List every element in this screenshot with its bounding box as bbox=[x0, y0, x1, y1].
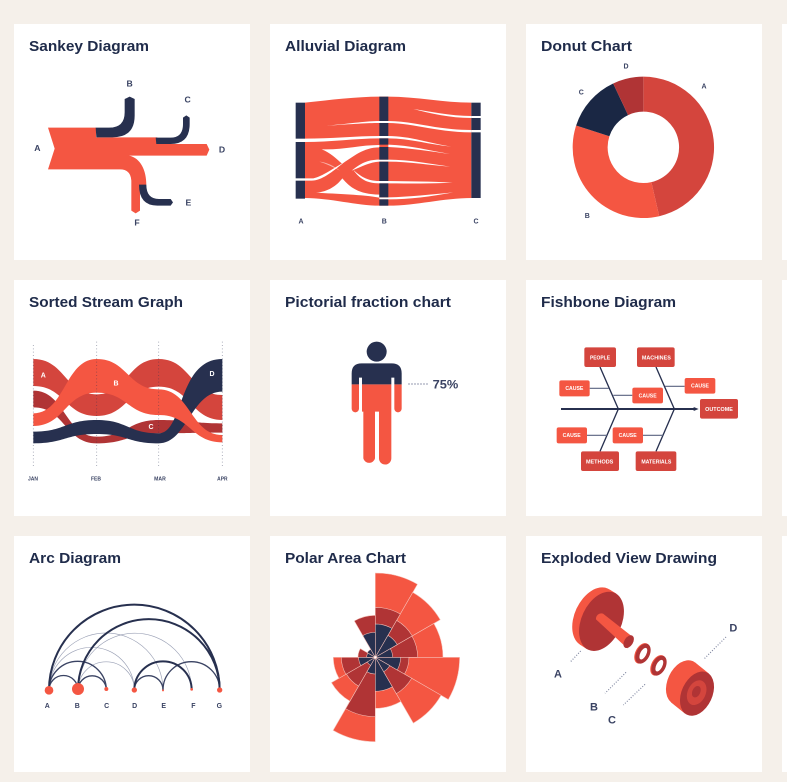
alluvial chart: C bbox=[473, 219, 479, 226]
stream graph: APR bbox=[217, 477, 228, 483]
part D: wheel bbox=[659, 655, 721, 721]
arc chart: A bbox=[45, 703, 50, 710]
heading: Alluvial Diagram: Alluvial Diagram bbox=[285, 38, 406, 55]
exploded view illustration: C bbox=[608, 714, 616, 726]
fishbone chart: CAUSE bbox=[563, 433, 581, 439]
heading: Fishbone Diagram: Fishbone Diagram bbox=[541, 294, 676, 311]
arc chart bbox=[45, 605, 222, 710]
alluvial chart: A bbox=[298, 219, 304, 226]
stream graph: MAR bbox=[154, 477, 166, 483]
polar area chart bbox=[328, 573, 460, 742]
donut chart: B bbox=[585, 213, 590, 220]
alluvial chart: B bbox=[382, 219, 387, 226]
donut chart: A bbox=[701, 83, 707, 90]
heading: Sorted Stream Graph: Sorted Stream Graph bbox=[29, 294, 183, 311]
arc chart: C bbox=[104, 703, 109, 710]
heading: Exploded View Drawing: Exploded View Drawing bbox=[541, 550, 717, 567]
exploded view illustration: B bbox=[590, 702, 598, 714]
donut chart: C bbox=[579, 90, 584, 97]
arc chart: F bbox=[191, 703, 196, 710]
exploded view illustration: D bbox=[729, 622, 737, 634]
heading: Sankey Diagram: Sankey Diagram bbox=[29, 38, 149, 55]
sankey chart bbox=[34, 79, 225, 228]
panel: Sankey Diagram bbox=[14, 24, 250, 260]
panel: Fishbone Diagram bbox=[526, 280, 762, 516]
sankey chart: A bbox=[34, 143, 41, 153]
sankey chart: F bbox=[134, 218, 140, 228]
stream graph: A bbox=[41, 372, 46, 379]
fishbone chart: CAUSE bbox=[565, 386, 584, 392]
heading: Arc Diagram: Arc Diagram bbox=[29, 550, 121, 567]
heading: Polar Area Chart: Polar Area Chart bbox=[285, 550, 406, 567]
donut chart bbox=[573, 64, 714, 220]
panel: Pictorial fraction chart bbox=[270, 280, 506, 516]
fishbone chart: MATERIALS bbox=[641, 459, 672, 465]
arc chart: D bbox=[132, 703, 137, 710]
arc chart: E bbox=[161, 703, 166, 710]
panel: Arc Diagram bbox=[14, 536, 250, 772]
heading: Donut Chart: Donut Chart bbox=[541, 38, 632, 55]
arc chart: G bbox=[217, 703, 222, 710]
stream graph bbox=[28, 342, 228, 483]
fishbone chart: MACHINES bbox=[642, 355, 671, 361]
heading: Pictorial fraction chart: Pictorial fraction chart bbox=[285, 294, 451, 311]
fishbone chart bbox=[557, 347, 738, 471]
sankey chart: E bbox=[185, 197, 191, 207]
sankey chart: C bbox=[185, 95, 192, 105]
panel: Alluvial Diagram bbox=[270, 24, 506, 260]
pictogram person: 75% bbox=[433, 378, 459, 392]
cropped cards on the right edge bbox=[782, 24, 787, 772]
panel: Sorted Stream Graph bbox=[14, 280, 250, 516]
fishbone chart: PEOPLE bbox=[590, 355, 610, 361]
sankey chart: B bbox=[127, 79, 133, 89]
fishbone chart: METHODS bbox=[586, 459, 614, 465]
panel: Donut Chart bbox=[526, 24, 762, 260]
panel: Polar Area Chart bbox=[270, 536, 506, 772]
part A: disc with shaft bbox=[563, 580, 636, 658]
part B: ring bbox=[631, 641, 654, 666]
part C: ring bbox=[647, 653, 670, 678]
stream graph: D bbox=[209, 371, 215, 378]
donut chart: D bbox=[623, 64, 629, 71]
alluvial chart bbox=[296, 97, 481, 226]
arc chart: B bbox=[75, 703, 80, 710]
panel: Exploded View Drawing bbox=[526, 536, 762, 772]
fishbone chart: OUTCOME bbox=[705, 407, 733, 413]
pictogram person bbox=[352, 342, 459, 464]
fishbone chart: CAUSE bbox=[619, 433, 637, 439]
exploded view illustration bbox=[554, 580, 737, 726]
stream graph: JAN bbox=[28, 477, 38, 483]
sankey chart: D bbox=[219, 145, 225, 155]
fishbone chart: CAUSE bbox=[639, 393, 657, 399]
stream graph: B bbox=[113, 381, 119, 388]
stream graph: FEB bbox=[91, 477, 101, 483]
stream graph: C bbox=[148, 424, 154, 431]
fishbone chart: CAUSE bbox=[691, 384, 709, 390]
exploded view illustration: A bbox=[554, 669, 562, 681]
